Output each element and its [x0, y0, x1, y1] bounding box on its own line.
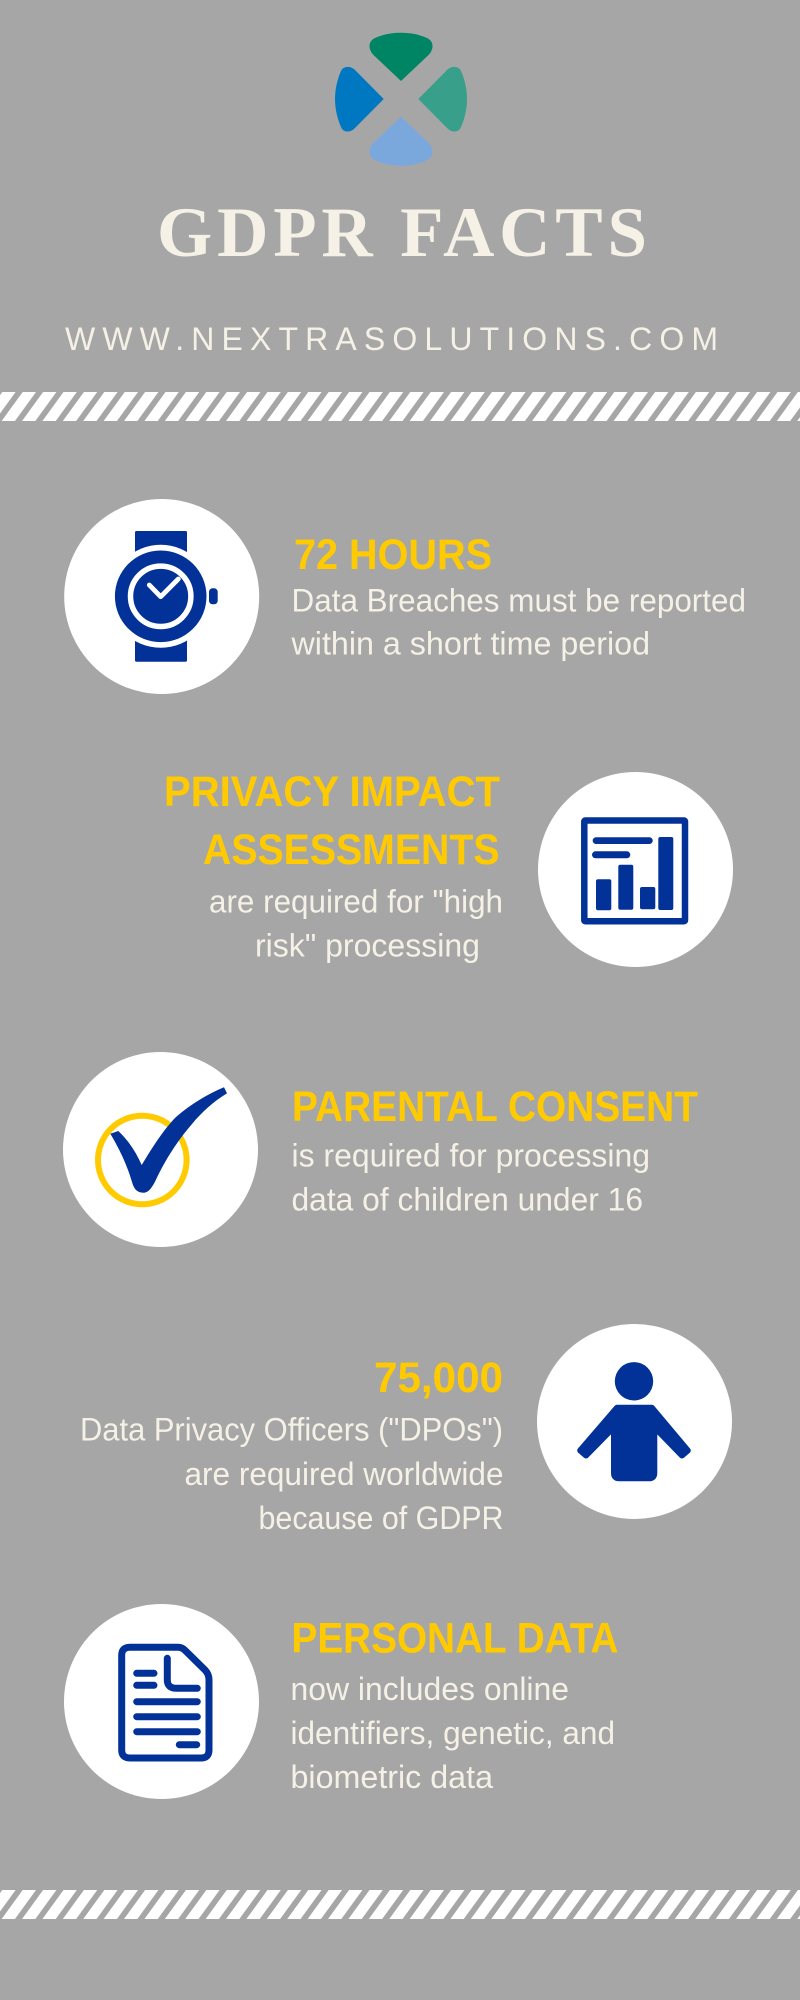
- icon circle: [64, 1604, 259, 1799]
- heading: PRIVACY IMPACT: [164, 768, 500, 816]
- description: [290, 1671, 615, 1795]
- icon: document: [122, 1647, 209, 1758]
- description: biometric data: [290, 1759, 493, 1795]
- icon circle: [64, 499, 259, 694]
- website url: WWW.NEXTRASOLUTIONS.COM: [65, 321, 718, 357]
- heading: PERSONAL DATA: [292, 1615, 618, 1663]
- icon circle: [538, 772, 733, 967]
- description: [292, 1138, 650, 1218]
- icon circle: [537, 1324, 732, 1519]
- striped band: top: [0, 392, 800, 421]
- description: data of children under 16: [292, 1182, 643, 1218]
- panel: 72 hours: [64, 499, 746, 694]
- panel: parental consent: [63, 1052, 698, 1247]
- icon: person: [580, 1362, 688, 1478]
- title: GDPR FACTS: [157, 194, 647, 272]
- description: is required for processing: [292, 1138, 650, 1174]
- striped band: bottom: [0, 1890, 800, 1919]
- panel: personal data: [64, 1604, 618, 1799]
- description: are required for "high: [209, 884, 503, 920]
- logo: [335, 33, 467, 166]
- heading: 75,000: [374, 1354, 503, 1402]
- heading: 72 HOURS: [294, 531, 492, 579]
- heading: ASSESSMENTS: [203, 826, 500, 874]
- heading: PARENTAL CONSENT: [292, 1083, 698, 1131]
- description: now includes online: [290, 1671, 569, 1707]
- icon: check mark in ring: [98, 1087, 227, 1204]
- description: identifiers, genetic, and: [290, 1715, 615, 1751]
- description: Data Breaches must be reported: [292, 582, 746, 618]
- panel: privacy impact assessments: [164, 768, 733, 967]
- description: [80, 1412, 504, 1536]
- description: risk" processing: [255, 928, 480, 964]
- icon: watch: [109, 531, 218, 662]
- icon: report chart: [584, 820, 685, 921]
- description: [290, 582, 746, 662]
- description: are required worldwide: [184, 1456, 504, 1492]
- description: within a short time period: [290, 626, 650, 662]
- icon circle: [63, 1052, 258, 1247]
- description: because of GDPR: [258, 1500, 504, 1536]
- panel: 75,000 DPOs: [80, 1324, 732, 1536]
- description: [209, 884, 503, 964]
- description: Data Privacy Officers ("DPOs"): [80, 1412, 503, 1448]
- heading: [164, 768, 500, 874]
